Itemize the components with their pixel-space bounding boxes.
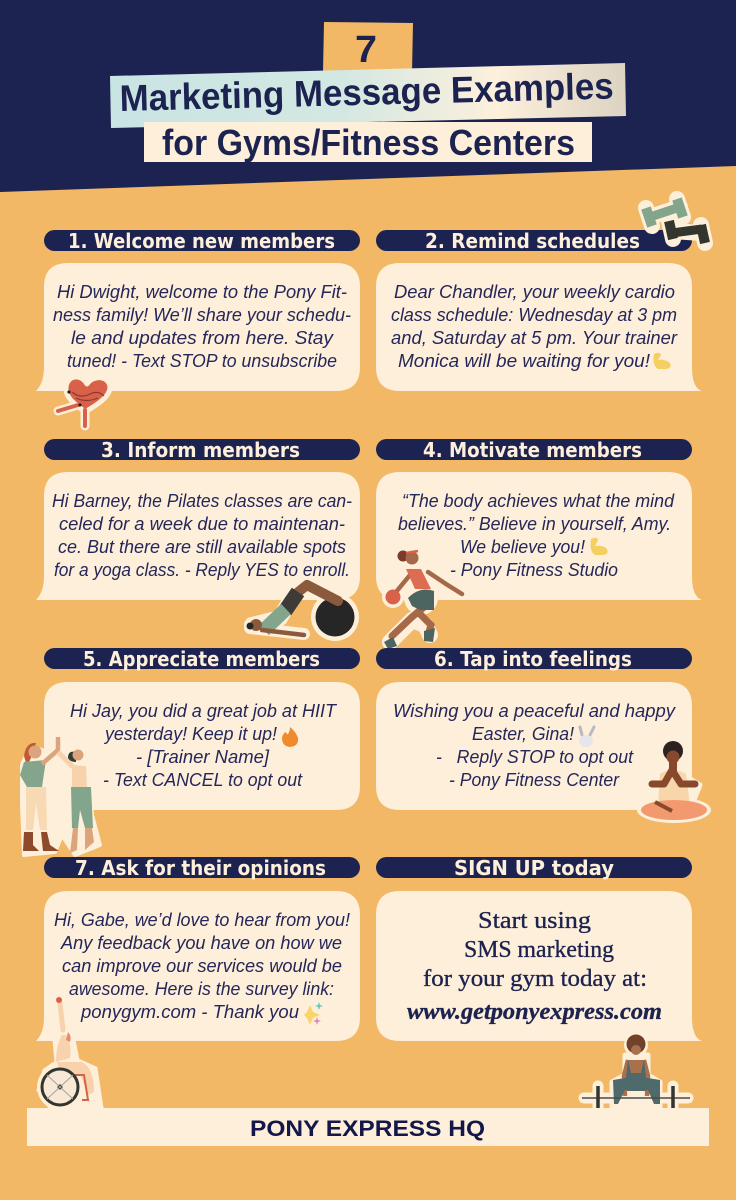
message bubble 1: tuned! - Text STOP to unsubscribe: [67, 350, 337, 371]
message bubble 4: [376, 472, 702, 600]
message bubble 6: Wishing you a peaceful and happy: [393, 700, 677, 721]
message bubble 7: Hi, Gabe, we’d love to hear from you!: [54, 909, 350, 930]
message bubble 2: Monica will be waiting for you!: [398, 350, 650, 371]
heading 6: [376, 647, 692, 671]
message bubble 4: “The body achieves what the mind: [402, 490, 675, 511]
message bubble 2: and, Saturday at 5 pm. Your trainer: [391, 327, 678, 348]
panel: 2 remind schedules: [376, 229, 702, 391]
heading 5: 5. Appreciate members: [83, 647, 320, 671]
title line 2: for Gyms/Fitness Centers: [162, 122, 575, 163]
panel: 6 tap into feelings: [376, 647, 702, 810]
icon: fire: [282, 727, 298, 747]
title line 1: Marketing Message Examples: [119, 66, 614, 119]
call to action bubble: [376, 891, 702, 1041]
icon: heart character: [58, 377, 110, 426]
panel: 3 inform members: [36, 438, 360, 600]
panel: 1 welcome new members: [36, 229, 360, 391]
message bubble 7: Any feedback you have on how we: [60, 932, 342, 953]
heading 3: [44, 438, 360, 462]
icon: rabbit: [579, 727, 594, 747]
message bubble 3: Hi Barney, the Pilates classes are can-: [52, 490, 352, 511]
panel: 7 ask for their opinions: [36, 856, 360, 1041]
icon: flexed arm: [654, 353, 671, 369]
footer band: PONY EXPRESS HQ: [250, 1116, 485, 1141]
panel: sign up today: [376, 856, 702, 1041]
heading sign up: [376, 856, 692, 880]
message bubble 5: - Text CANCEL to opt out: [103, 769, 303, 790]
message bubble 3: for a yoga class. - Reply YES to enroll.: [54, 559, 350, 580]
icon: person in wheelchair: [37, 997, 102, 1110]
message bubble 6: - Pony Fitness Center: [449, 769, 620, 790]
icon: dumbbells: [646, 199, 705, 243]
message bubble 1: ness family! We’ll share your schedu-: [53, 304, 351, 325]
heading 7: 7. Ask for their opinions: [75, 856, 326, 880]
icon: barbell lifter: [582, 1033, 690, 1108]
message bubble 3: ce. But there are still available spots: [58, 536, 346, 557]
footer band: [27, 1108, 709, 1146]
title number 7: [323, 22, 413, 72]
message bubble 6: Easter, Gina!: [472, 723, 574, 744]
call to action bubble: SMS marketing: [464, 937, 614, 963]
message bubble 3: celed for a week due to maintenan-: [59, 513, 345, 534]
message bubble 1: [36, 263, 360, 391]
message bubble 3: [36, 472, 360, 600]
message bubble 4: believes.” Believe in yourself, Amy.: [398, 513, 671, 534]
icon: high five figures: [20, 737, 100, 855]
icon: basketball player: [382, 550, 462, 649]
message bubble 2: [376, 263, 702, 391]
heading 3: 3. Inform members: [101, 438, 300, 462]
call to action bubble: Start using: [478, 908, 591, 934]
message bubble 7: awesome. Here is the survey link:: [69, 978, 334, 999]
icon: pilates ball exercise: [246, 585, 359, 641]
header banner: [0, 0, 736, 192]
message bubble 1: le and updates from here. Stay: [71, 327, 335, 348]
message bubble 1: Hi Dwight, welcome to the Pony Fit-: [57, 281, 347, 302]
message bubble 5: - [Trainer Name]: [136, 746, 270, 767]
message bubble 7: ponygym.com - Thank you: [80, 1001, 299, 1022]
heading 2: 2. Remind schedules: [425, 229, 640, 253]
message bubble 5: [36, 682, 360, 810]
message bubble 2: class schedule: Wednesday at 3 pm: [391, 304, 677, 325]
title number 7: 7: [355, 29, 377, 71]
call to action bubble: for your gym today at:: [423, 966, 647, 992]
message bubble 6: - Reply STOP to opt out: [436, 746, 634, 767]
message bubble 7: [36, 891, 360, 1041]
icon: meditating person: [637, 740, 711, 823]
heading 4: 4. Motivate members: [423, 438, 642, 462]
panel: 5 appreciate members: [36, 647, 360, 810]
call to action bubble: www.getponyexpress.com: [407, 999, 662, 1025]
heading sign up: SIGN UP today: [454, 856, 614, 880]
message bubble 7: can improve our services would be: [62, 955, 342, 976]
message bubble 2: Dear Chandler, your weekly cardio: [394, 281, 675, 302]
message bubble 5: yesterday! Keep it up!: [103, 723, 277, 744]
message bubble 4: We believe you!: [460, 536, 585, 557]
icon: flexed arm: [590, 538, 608, 555]
heading 1: 1. Welcome new members: [68, 229, 335, 253]
message bubble 4: - Pony Fitness Studio: [450, 559, 618, 580]
message bubble 6: [376, 682, 702, 810]
heading 6: 6. Tap into feelings: [434, 647, 632, 671]
panel: 4 motivate members: [376, 438, 702, 600]
message bubble 5: Hi Jay, you did a great job at HIIT: [70, 700, 338, 721]
icon: sparkles: [304, 1002, 323, 1025]
